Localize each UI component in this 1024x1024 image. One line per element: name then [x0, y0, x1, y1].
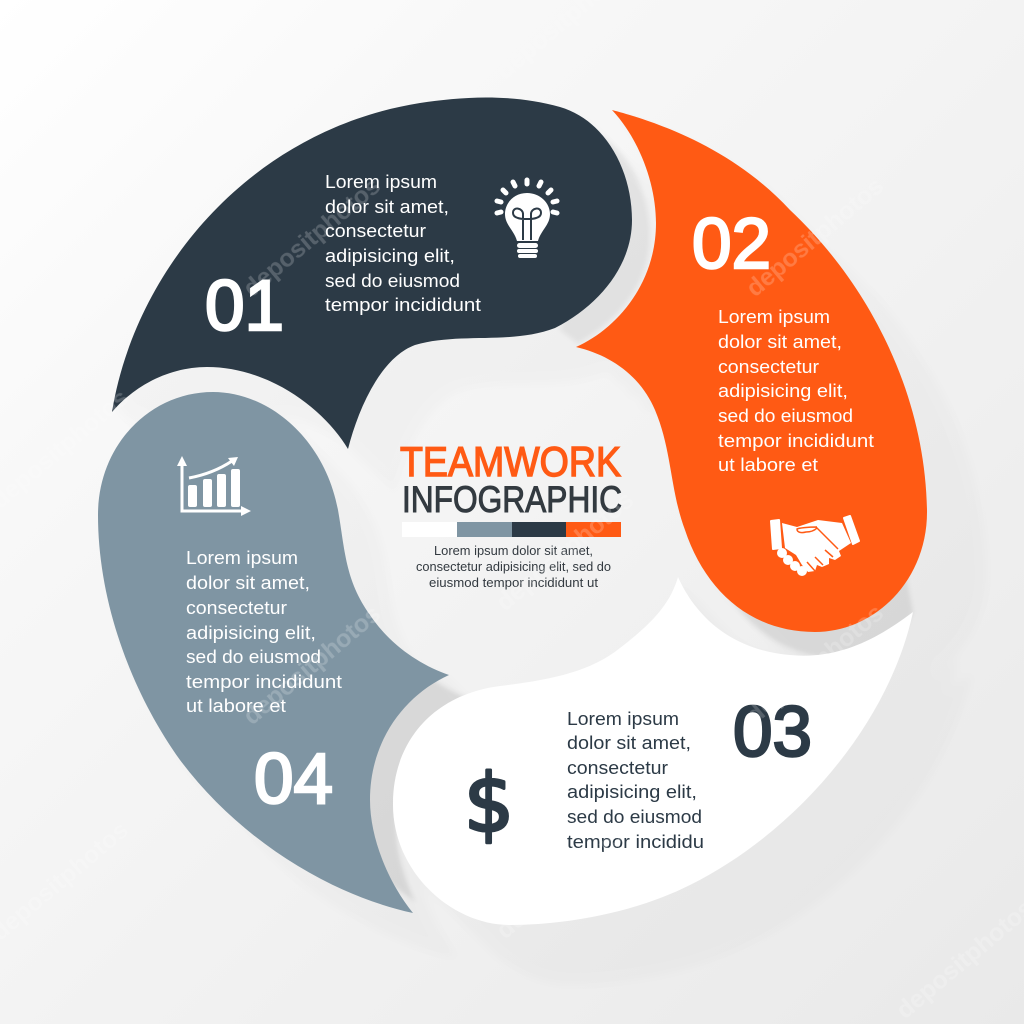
text block 02 — [718, 306, 874, 475]
icon: dollar sign: $ — [464, 757, 514, 850]
text block 01: dolor sit amet, — [325, 196, 449, 217]
text block 01: adipisicing elit, — [325, 245, 455, 266]
colour bar — [402, 522, 621, 537]
text block 01: Lorem ipsum — [325, 171, 437, 192]
text block 02: adipisicing elit, — [718, 380, 848, 401]
watermarks: depositphotos — [238, 172, 386, 303]
number 03: 03 — [733, 693, 812, 772]
text block 04: adipisicing elit, — [186, 622, 316, 643]
text block 04: sed do eiusmod — [186, 646, 321, 667]
text block 03: sed do eiusmod — [567, 806, 702, 827]
watermarks: depositphotos — [741, 599, 889, 730]
text block 02: sed do eiusmod — [718, 405, 853, 426]
text block 04: Lorem ipsum — [186, 547, 298, 568]
number 02: 02 — [692, 205, 771, 284]
number 04: 04 — [254, 740, 333, 819]
text block 03: consectetur — [567, 757, 668, 778]
text block 01: tempor incididunt — [325, 294, 481, 315]
text block 02: tempor incididunt — [718, 430, 874, 451]
icon: handshake — [771, 516, 859, 576]
text block 04: ut labore et — [186, 695, 286, 716]
text block 04: tempor incididunt — [186, 671, 342, 692]
text block 02: consectetur — [718, 356, 819, 377]
icon: light bulb — [497, 180, 557, 258]
number 01: 01 — [205, 267, 284, 346]
gap shadows — [124, 116, 953, 939]
text block 04: consectetur — [186, 597, 287, 618]
panel 04: grey petal — [98, 392, 449, 913]
text block 02: ut labore et — [718, 454, 818, 475]
center caption: eiusmod tempor incididunt ut — [429, 576, 599, 590]
watermarks: depositphotos — [741, 172, 889, 303]
center title block — [400, 438, 622, 590]
panel 01: dark petal — [112, 98, 632, 449]
text block 04 — [186, 547, 342, 716]
text block 01: sed do eiusmod — [325, 270, 460, 291]
watermarks: depositphotos — [491, 814, 639, 945]
center caption: consectetur adipisicing elit, sed do — [416, 560, 611, 574]
text block 03: Lorem ipsum — [567, 708, 679, 729]
title: teamwork: TEAMWORK — [400, 438, 621, 485]
text block 03: adipisicing elit, — [567, 781, 697, 802]
center caption — [416, 544, 611, 590]
center caption: Lorem ipsum dolor sit amet, — [434, 544, 593, 558]
text block 02: Lorem ipsum — [718, 306, 830, 327]
text block 01 — [325, 171, 481, 315]
panel 03: white petal — [393, 577, 913, 925]
long shadows — [102, 102, 987, 985]
text block 01: consectetur — [325, 220, 426, 241]
panel 02: orange petal — [576, 110, 927, 632]
watermarks: depositphotos — [491, 486, 639, 617]
watermarks: depositphotos — [238, 600, 386, 731]
text block 03 — [567, 708, 704, 852]
text block 03: tempor incididu — [567, 831, 704, 852]
text block 03: dolor sit amet, — [567, 732, 691, 753]
text block 04: dolor sit amet, — [186, 572, 310, 593]
icon: growth chart — [177, 456, 251, 516]
text block 02: dolor sit amet, — [718, 331, 842, 352]
title: infographic: INFOGRAPHIC — [402, 478, 622, 520]
